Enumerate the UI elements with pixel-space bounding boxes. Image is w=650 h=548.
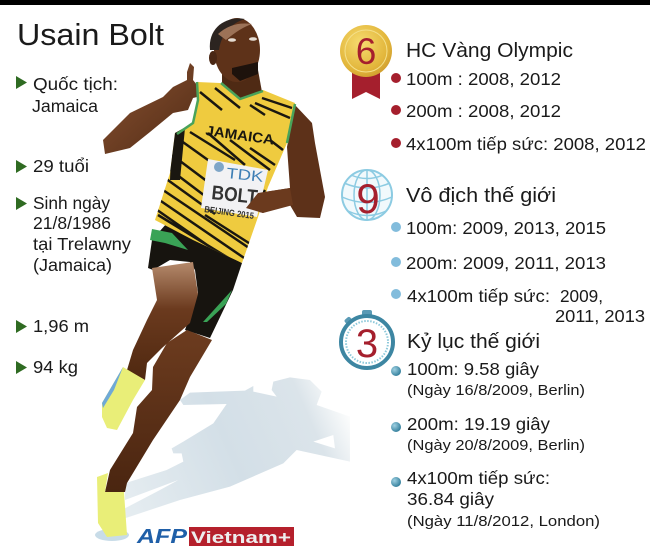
athlete shadow (125, 377, 350, 518)
list item (391, 414, 585, 454)
list item: 4x100m tiếp sức: 2008, 2012 (406, 134, 646, 154)
icon: globe (342, 170, 392, 222)
race bib: TDK (226, 165, 264, 186)
icon: gold medal (340, 25, 392, 99)
fact: age: 29 tuổi (33, 156, 89, 176)
panel: Olympic gold (340, 25, 646, 154)
list item: 200m: 19.19 giây (407, 414, 550, 434)
front thigh and lower leg (127, 262, 198, 380)
list item: 4x100m tiếp sức: (407, 468, 550, 488)
list item: 2011, 2013 (555, 306, 645, 326)
icon: stopwatch: 3 (356, 322, 378, 366)
panel: world champion (342, 170, 645, 326)
list item: (Ngày 11/8/2012, London) (407, 514, 600, 530)
icon: stopwatch (341, 310, 393, 368)
top black bar (0, 0, 650, 5)
right arm and hand (245, 105, 325, 218)
list item: 4x100m tiếp sức: (407, 286, 550, 306)
jersey green collar and trim (177, 82, 295, 143)
race bib: BOLT (210, 182, 259, 209)
heading: Vô địch thế giới (406, 184, 556, 207)
race bib (201, 159, 268, 221)
list item: 36.84 giây (407, 489, 494, 509)
jersey text: JAMAICA (205, 122, 275, 148)
fact: birth: Sinh ngày (33, 193, 110, 213)
fact: weight (16, 357, 78, 377)
fact: height: 1,96 m (33, 316, 89, 336)
left arm and hand (103, 63, 205, 154)
list item: 2009, (560, 286, 603, 306)
race bib: BEIJING 2015 (204, 204, 255, 221)
logo: AFP: AFP (136, 526, 188, 548)
lower shoe shadow (95, 529, 129, 541)
head (209, 18, 260, 82)
fact: nationality (16, 74, 118, 116)
list item: (Ngày 16/8/2009, Berlin) (407, 383, 585, 399)
logo: Vietnam+: Vietnam+ (191, 528, 291, 547)
icon: globe: 9 (356, 175, 380, 222)
neck (222, 70, 262, 101)
heading: HC Vàng Olympic (406, 39, 573, 62)
fact: nationality: Jamaica (32, 96, 98, 116)
list item: 200m: 2009, 2011, 2013 (406, 253, 606, 273)
list item (391, 359, 585, 399)
list item: 200m : 2008, 2012 (406, 101, 561, 121)
athlete (95, 18, 325, 541)
fact: weight: 94 kg (33, 357, 78, 377)
logos (136, 526, 294, 548)
list item: 100m: 2009, 2013, 2015 (406, 218, 606, 238)
panel: personal facts (16, 74, 131, 377)
fact: nationality: Quốc tịch: (33, 74, 118, 94)
list item: 100m: 9.58 giây (407, 359, 539, 379)
list item: 100m : 2008, 2012 (406, 69, 561, 89)
shorts (148, 223, 242, 338)
fact: birth: tại Trelawny (33, 234, 131, 254)
fact: birth (16, 193, 131, 275)
jersey (150, 82, 295, 268)
back leg (105, 330, 212, 492)
list item: (Ngày 20/8/2009, Berlin) (407, 438, 585, 454)
logo: Vietnam+ (189, 527, 294, 547)
heading: Kỷ lục thế giới (407, 330, 540, 353)
fact: birth: (Jamaica) (33, 255, 112, 275)
shorts green trim (150, 229, 232, 322)
list item (391, 286, 645, 326)
list item (391, 468, 600, 530)
upper shoe (102, 367, 145, 430)
icon: gold medal: 6 (356, 31, 376, 72)
title: Usain Bolt (17, 17, 164, 52)
lower shoe (97, 473, 127, 537)
hand over bib (246, 188, 293, 213)
panel: world records (341, 310, 600, 530)
fact: birth: 21/8/1986 (33, 213, 111, 233)
